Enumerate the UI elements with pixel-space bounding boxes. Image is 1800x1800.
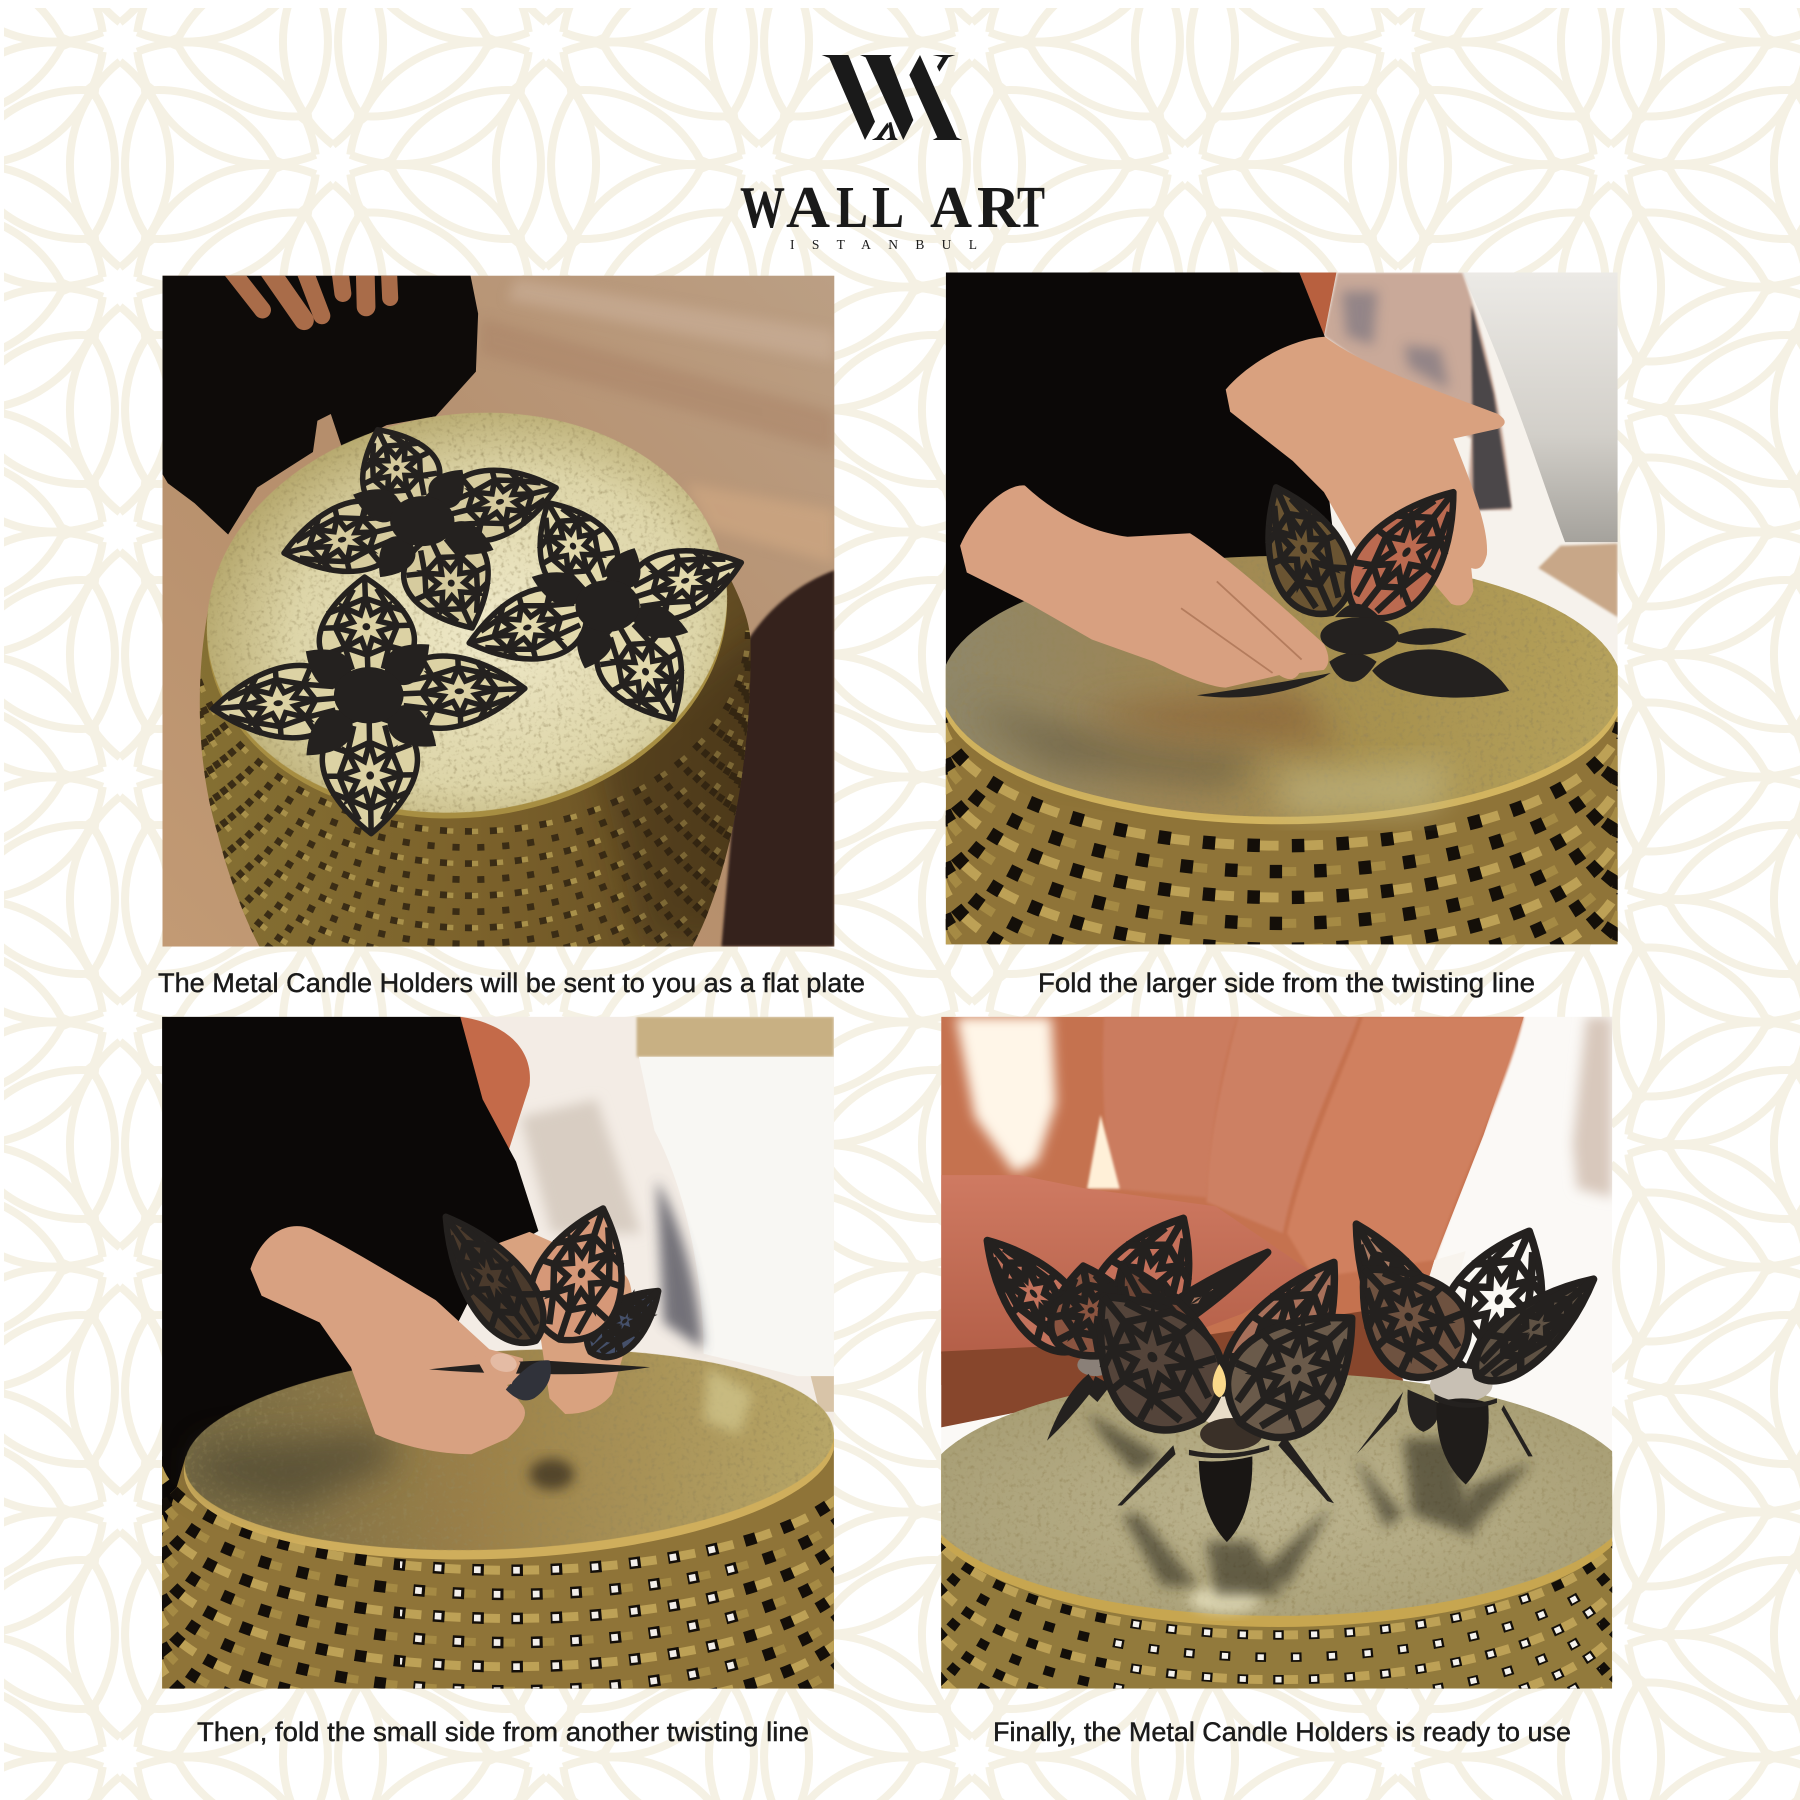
wordmark: WALL ART: L xyxy=(836,174,868,240)
woven table body xyxy=(926,1508,1631,1791)
flat petals and hub xyxy=(1197,604,1509,698)
lower left hand xyxy=(960,485,1328,688)
table gold top xyxy=(921,1373,1635,1627)
stool gold top xyxy=(179,1334,840,1575)
lattice petals xyxy=(517,1195,674,1369)
black sweater xyxy=(162,1017,538,1537)
black trousers xyxy=(163,276,478,535)
wordmark: WALL ART: A xyxy=(786,174,830,240)
flat candle holder A xyxy=(281,427,559,631)
wordmark: WALL ART: T xyxy=(1017,174,1045,240)
caption: step 1: The Metal Candle Holders will be sent to you as a flat plate xyxy=(158,968,865,998)
wordmark: WALL ART: L xyxy=(872,174,904,240)
front lattice petal and flap xyxy=(421,1198,650,1400)
back left candle holder xyxy=(964,1196,1274,1441)
bright background xyxy=(1300,272,1618,666)
caption: step 3: Then, fold the small side from another twisting line xyxy=(197,1717,809,1747)
woven stool body xyxy=(946,688,1618,944)
candle flame xyxy=(1213,1364,1226,1398)
upper right hand xyxy=(1226,337,1505,605)
panel: step 2 photo, folding the larger side xyxy=(946,272,1618,944)
woven stool body xyxy=(157,1439,862,1787)
flat candle holder C xyxy=(210,575,526,834)
upright lattice petals xyxy=(1265,484,1457,622)
woven stool body xyxy=(200,581,750,947)
wordmark: WALL ART: A xyxy=(930,174,972,240)
resting hand fingers xyxy=(230,269,390,320)
flat candle holder B xyxy=(466,500,744,722)
front hand xyxy=(250,1226,525,1454)
front candle holder with lit tea light xyxy=(1060,1239,1388,1542)
wordmark: WALL ART: R xyxy=(977,174,1021,240)
panel: step 4 photo, finished candle holders xyxy=(921,1017,1635,1791)
stool gold top xyxy=(206,412,728,818)
bright background xyxy=(460,1016,834,1432)
stool gold top xyxy=(940,556,1623,824)
caption: step 4: Finally, the Metal Candle Holders is ready to use xyxy=(993,1717,1571,1747)
wordmark: ISTANBUL: ISTANBUL xyxy=(790,237,977,252)
wooden floor xyxy=(163,276,834,947)
wordmark: WALL ART: W xyxy=(740,174,785,240)
right candle holder xyxy=(1329,1208,1610,1485)
icon: WA monogram xyxy=(822,55,962,140)
dark rug xyxy=(721,570,834,947)
logo: Wall Art Istanbul xyxy=(740,55,1045,252)
panel: step 1 photo, flat plates on stool xyxy=(162,276,834,947)
black sweater xyxy=(946,273,1335,689)
caption: step 2: Fold the larger side from the twisting line xyxy=(1038,968,1535,998)
wordmark: WALL ART xyxy=(740,174,1045,240)
back hand xyxy=(489,1232,632,1414)
cast shadows on table xyxy=(1086,1412,1533,1595)
velvet chair background xyxy=(941,1017,1612,1689)
panel: step 3 photo, folding the small side xyxy=(162,1016,834,1689)
